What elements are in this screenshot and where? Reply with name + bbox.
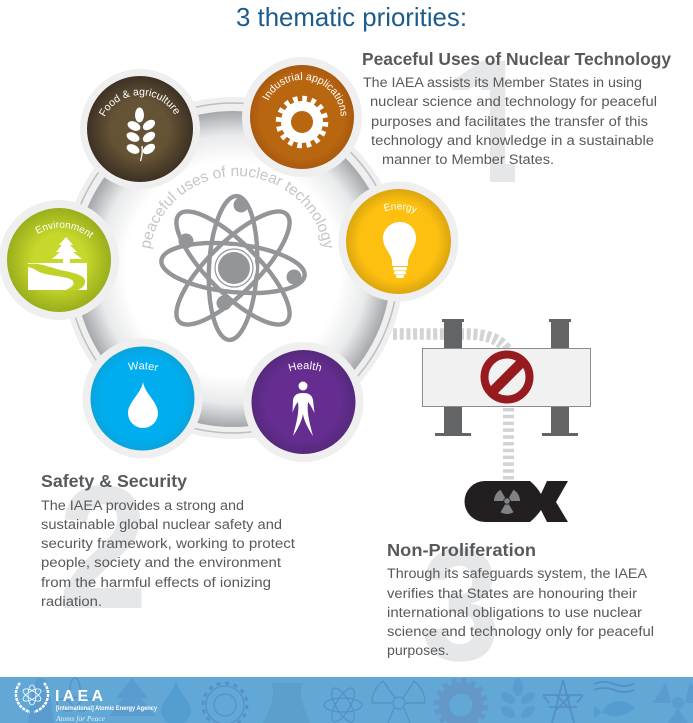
body text — [363, 75, 657, 168]
icon: environment: Environment — [35, 221, 94, 238]
body text: technology and knowledge in a sustainable — [371, 133, 654, 149]
icon: water — [82, 338, 202, 458]
icon: energy — [338, 182, 458, 302]
icon: industrial applications: Industrial applications — [262, 72, 346, 116]
inner gradient disk — [75, 111, 391, 427]
footer band — [0, 677, 693, 723]
numeral 1: 1 — [440, 24, 538, 220]
body text: people, society and the environment — [41, 555, 281, 571]
icon: food and agriculture — [80, 69, 200, 188]
heading: Safety & Security — [41, 471, 187, 491]
body text: international obligations to use nuclear — [387, 605, 642, 621]
body text: The IAEA provides a strong and — [41, 498, 244, 514]
body text — [41, 498, 295, 610]
barrier board — [422, 348, 590, 406]
numeral 2: 2 — [58, 450, 148, 646]
panel: peaceful uses text — [362, 49, 671, 168]
icon: environment — [0, 200, 119, 320]
body text: The IAEA assists its Member States in using — [363, 75, 642, 91]
heading: Non-Proliferation — [387, 540, 536, 560]
icon: bomb — [464, 481, 568, 522]
icon: energy: Energy — [384, 203, 418, 214]
body text: sustainable global nuclear safety and — [41, 517, 282, 533]
outer ring — [62, 97, 404, 439]
barrier posts — [435, 319, 578, 436]
IAEA wordmark: IAEA — [55, 688, 103, 705]
panel: safety and security text — [41, 471, 295, 610]
body text: manner to Member States. — [382, 152, 554, 168]
tagline: Atoms for Peace — [55, 714, 106, 723]
ring line — [68, 103, 398, 433]
dotted connector — [393, 334, 507, 350]
numeral 3: 3 — [420, 515, 500, 694]
panel: nuclear technology hub — [70, 97, 400, 439]
footer pictograms — [28, 678, 693, 723]
footer outline pictograms — [55, 678, 634, 723]
body text: radiation. — [41, 594, 102, 610]
panel: non-proliferation text — [387, 540, 654, 659]
body text: Through its safeguards system, the IAEA — [387, 566, 648, 582]
icon: food and agriculture: Food & agriculture — [98, 88, 179, 116]
icon: health: Health — [288, 361, 322, 372]
agency name: [International] Atomic Energy Agency — [56, 705, 157, 712]
body text: from the harmful effects of ionizing — [41, 575, 271, 591]
body text: verifies that States are honouring their — [387, 586, 637, 602]
dotted connector down — [503, 408, 514, 481]
body text: science and technology only for peaceful — [387, 624, 654, 640]
icon: atom — [159, 195, 307, 341]
body text: nuclear science and technology for peaceful — [370, 94, 657, 110]
body text: purposes. — [387, 643, 449, 659]
icon: industrial applications — [242, 57, 362, 177]
IAEA logo — [16, 683, 48, 712]
heading: Peaceful Uses of Nuclear Technology — [362, 49, 671, 69]
panel: non-proliferation graphic — [393, 319, 590, 522]
icon: health — [244, 342, 364, 462]
icon: prohibition sign — [484, 354, 530, 400]
curved caption: peaceful uses of nuclear technology — [142, 166, 332, 249]
body text: purposes and facilitates the transfer of this — [371, 114, 648, 130]
icon: water: Water — [128, 362, 158, 371]
body text — [387, 566, 654, 659]
title: 3 thematic priorities: — [236, 2, 467, 32]
body text: security framework, working to protect — [41, 536, 295, 552]
